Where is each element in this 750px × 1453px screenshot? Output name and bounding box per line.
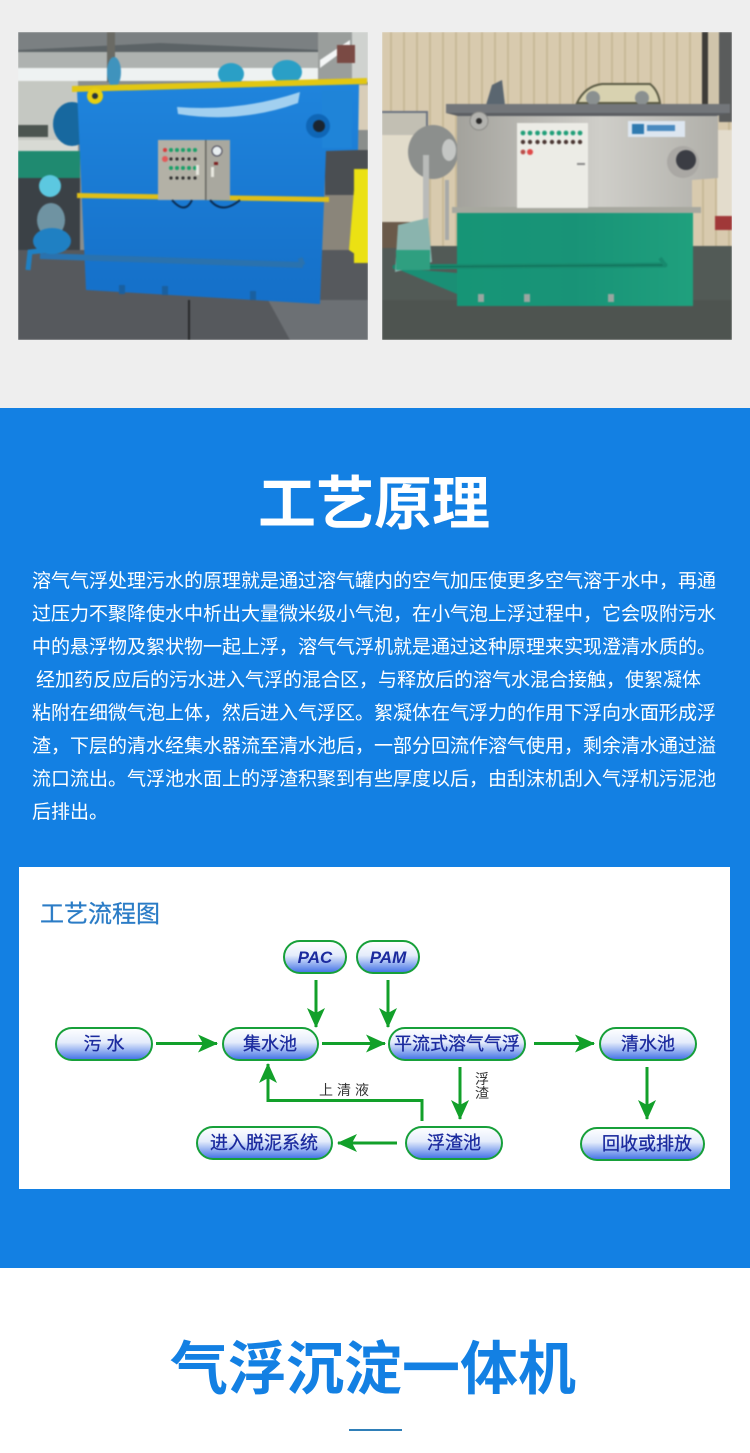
node: collection tank: 集水池 <box>243 1034 297 1054</box>
green body <box>457 213 693 306</box>
heading underline <box>349 1429 402 1431</box>
paragraph: principle text: 后排出。 <box>32 802 108 823</box>
heading: process principle: 工艺原理 <box>258 472 490 537</box>
node: PAM <box>357 941 419 973</box>
arrows <box>156 980 647 1143</box>
node: PAC <box>284 941 346 973</box>
tank sphere <box>53 102 91 146</box>
pressure vessel <box>408 125 458 179</box>
control cabinet <box>517 123 588 208</box>
flow chart diagram <box>55 940 705 1161</box>
node: sewage: 污 水 <box>83 1034 125 1054</box>
label: supernatant: 上清液 <box>319 1082 373 1098</box>
paragraph: principle text: 渣，下层的清水经集水器流至清水池后，一部分回流作溶气使用，剩余清水通过溢 <box>32 736 716 757</box>
node: scum tank: 浮渣池 <box>427 1133 481 1153</box>
heading: flotation sedimentation integrated machine: 气浮沉淀一体机 <box>170 1337 576 1402</box>
node: sludge dewatering system: 进入脱泥系统 <box>210 1133 318 1153</box>
control cabinet <box>158 140 230 200</box>
node: collection tank <box>223 1028 318 1060</box>
logo label <box>628 121 685 137</box>
yellow tank <box>354 169 368 263</box>
label: scum: 浮 <box>475 1071 489 1087</box>
paragraph: principle text: 溶气气浮处理污水的原理就是通过溶气罐内的空气加压使更多空气溶于水中，再通 <box>32 571 716 592</box>
node: clear water tank <box>600 1028 696 1060</box>
node: PAC: PAC <box>298 948 333 967</box>
label: scum <box>475 1071 489 1101</box>
paragraph: principle text: 过压力不聚降使水中析出大量微米级小气泡，在小气泡上浮过程中，它会吸附污水 <box>32 604 716 625</box>
paragraph: principle text: 粘附在细微气泡上体，然后进入气浮区。絮凝体在气浮力的作用下浮向水面形成浮 <box>32 703 716 724</box>
flow chart title: 工艺流程图 <box>40 901 160 928</box>
ledge <box>452 207 701 213</box>
node: recycle or discharge: 回收或排放 <box>602 1134 692 1154</box>
label: scum: 渣 <box>475 1085 489 1101</box>
hoist and fixtures <box>107 32 115 82</box>
node: PAM: PAM <box>370 948 407 967</box>
paragraph: principle text: 经加药反应后的污水进入气浮的混合区，与释放后的溶气水混合接触，使絮凝体 <box>36 670 701 691</box>
wrapped motor <box>395 218 432 272</box>
paragraph: principle text <box>32 570 716 823</box>
node: recycle or discharge <box>581 1128 704 1160</box>
tank top equipment <box>486 80 505 105</box>
paragraph: principle text: 流口流出。气浮池水面上的浮渣积聚到有些厚度以后，由刮沫机刮入气浮机污泥池 <box>32 769 716 790</box>
blue process principle section <box>0 408 750 1268</box>
yellow rims <box>72 78 367 92</box>
node: clear water tank: 清水池 <box>621 1034 675 1054</box>
tank body <box>77 84 359 304</box>
panel: process flow chart <box>19 867 730 1189</box>
pipe <box>40 256 303 265</box>
valve wrapped <box>37 203 65 237</box>
photo: green and steel flotation unit <box>382 32 732 340</box>
node: advection dissolved air flotation <box>389 1028 525 1060</box>
node: sludge dewatering system <box>197 1127 332 1159</box>
node: advection dissolved air flotation: 平流式溶气气浮 <box>394 1034 520 1054</box>
node: sewage <box>56 1028 152 1060</box>
node: scum tank <box>406 1127 502 1159</box>
paragraph: principle text: 中的悬浮物及絮状物一起上浮，溶气气浮机就是通过这种原理来实现澄清水质的。 <box>32 637 716 658</box>
flanges <box>87 88 103 104</box>
steel body <box>457 110 718 208</box>
top photo section <box>0 0 750 408</box>
photo: blue flotation unit <box>18 32 368 340</box>
drains <box>119 285 256 300</box>
